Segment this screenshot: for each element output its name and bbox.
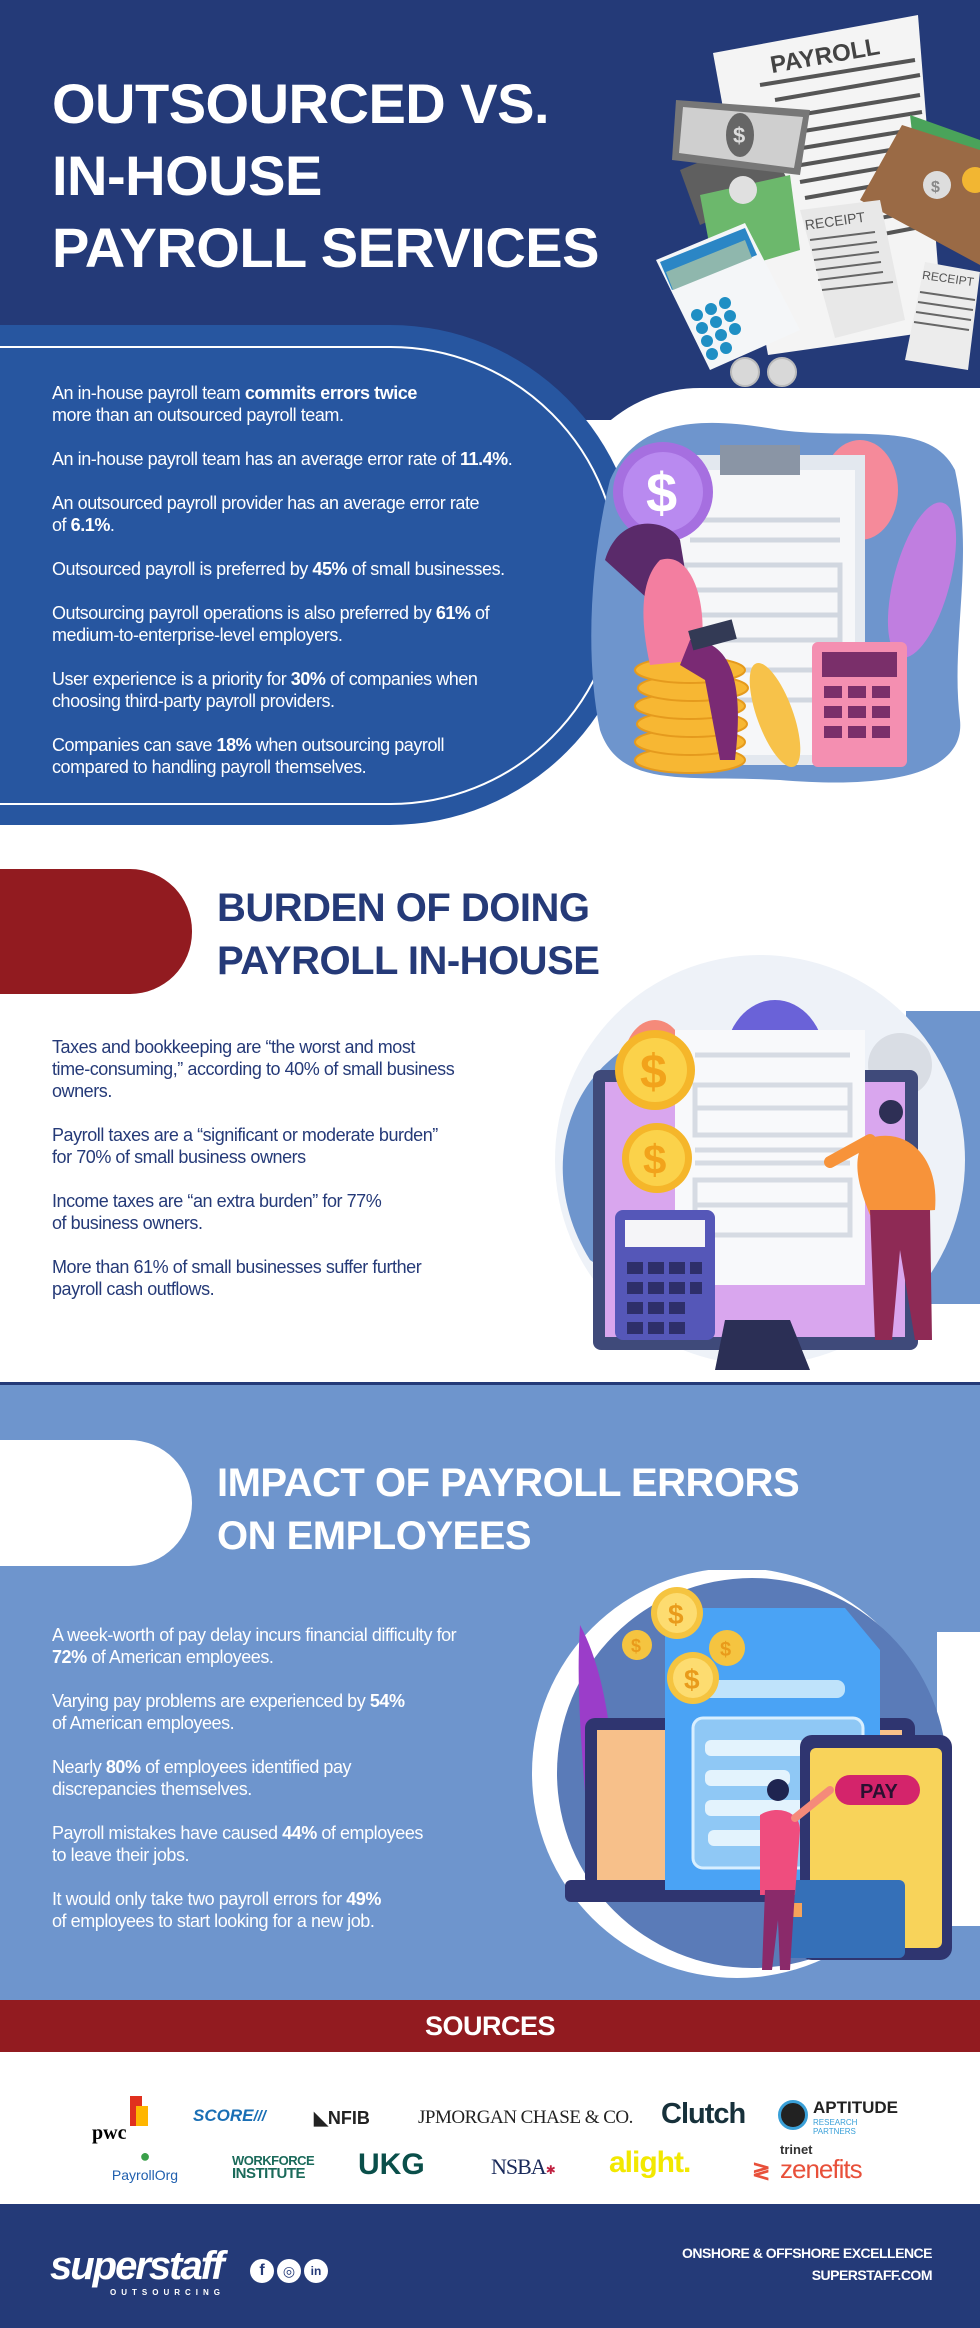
- stat: 54%: of American employees.: [52, 1713, 234, 1733]
- grey bills: [672, 100, 810, 275]
- illustration: invoice, phone PAY, man: $: [720, 1639, 731, 1661]
- stat: 30%: [52, 669, 477, 711]
- stat: 49%: [52, 1889, 381, 1931]
- impact stats text: [52, 1625, 456, 1931]
- stat: 61%: payroll cash outflows.: [52, 1279, 214, 1299]
- sources header bar: SOURCES: [425, 2011, 555, 2041]
- logo: Workforce Institute: WORKFORCE: [232, 2153, 314, 2168]
- logo: trinet zenefits: [752, 2142, 862, 2184]
- receipts: RECEIPT: [804, 209, 867, 233]
- logo: alight: alight.: [609, 2146, 690, 2179]
- footer: [0, 2204, 980, 2328]
- stat: 77%: [52, 1191, 382, 1233]
- logo: Aptitude: [778, 2098, 898, 2136]
- logo: Workforce Institute: [232, 2153, 314, 2182]
- stat: 49%: It would only take two payroll errors for 49%: [52, 1889, 381, 1909]
- logo: trinet zenefits: ≷: [752, 2158, 770, 2183]
- stat: errors twice: An in-house payroll team commits errors twice: [52, 383, 417, 403]
- wallet with green bill: $: [931, 179, 940, 196]
- white backdrop for illustration: [560, 388, 980, 858]
- stat: 44%: to leave their jobs.: [52, 1845, 189, 1865]
- stat: 11.4%: An in-house payroll team has an average error rate of 11.4%.: [52, 449, 512, 469]
- stat: 40%: [52, 1037, 454, 1101]
- title: PAYROLL SERVICES: [52, 216, 599, 279]
- coins: [731, 358, 796, 386]
- stat: 72%: 72% of American employees.: [52, 1647, 273, 1667]
- logo: Aptitude: RESEARCH PARTNERS: [813, 2118, 857, 2136]
- logo: JPMorgan: JPMORGAN CHASE & CO.: [418, 2107, 633, 2128]
- stat: 40%: Taxes and bookkeeping are “the worst and most: [52, 1037, 415, 1057]
- stat: 40%: owners.: [52, 1081, 112, 1101]
- logo: trinet zenefits: zenefits: [780, 2154, 862, 2184]
- white pill: [0, 1440, 192, 1566]
- stat: 40%: time-consuming,” according to 40% of small business: [52, 1059, 454, 1079]
- stat: 6.1%: [52, 493, 479, 535]
- stat: 61%: Outsourcing payroll operations is also preferred by 61% of: [52, 603, 489, 623]
- divider line: [0, 1382, 980, 1385]
- stat: 70%: Payroll taxes are a “significant or moderate burden”: [52, 1125, 438, 1145]
- stat: 72%: A week-worth of pay delay incurs financial difficulty for: [52, 1625, 456, 1645]
- illustration: invoice, phone PAY, man: [532, 1570, 980, 1978]
- heading: IMPACT OF PAYROLL ERRORS: [217, 1461, 799, 1505]
- stat: 18%: Companies can save 18% when outsourcing payroll: [52, 735, 444, 755]
- grey bills: $: [733, 123, 745, 148]
- stat: 54%: [52, 1691, 405, 1733]
- social icons: f: [259, 2262, 265, 2279]
- logo: trinet zenefits: trinet: [780, 2142, 812, 2157]
- logo: Workforce Institute: INSTITUTE: [232, 2165, 305, 2182]
- logo: superstaff: superstaff: [50, 2244, 223, 2288]
- stat: 6.1%: An outsourced payroll provider has an average error rate: [52, 493, 479, 513]
- header background: [0, 0, 980, 420]
- social icons: ◎: [283, 2263, 295, 2279]
- stat: 80%: Nearly 80% of employees identified pay: [52, 1757, 351, 1777]
- stat: errors twice: more than an outsourced payroll team.: [52, 405, 344, 425]
- stat: 61%: [52, 603, 490, 645]
- stat: 61%: [52, 1257, 422, 1299]
- red pill: [0, 869, 192, 994]
- stat: 54%: Varying pay problems are experienced by 54%: [52, 1691, 405, 1711]
- logo: Aptitude: APTITUDE: [813, 2098, 898, 2117]
- stat: 45%: Outsourced payroll is preferred by 45% of small businesses.: [52, 559, 505, 579]
- panel outline: [0, 346, 620, 805]
- illustration: invoice, phone PAY, man: $: [668, 1599, 684, 1630]
- stat: errors twice: [52, 383, 417, 425]
- title: [52, 72, 599, 279]
- footer tagline: SUPERSTAFF.COM: [812, 2267, 932, 2283]
- stat: 44%: Payroll mistakes have caused 44% of employees: [52, 1823, 423, 1843]
- panel background: [0, 325, 640, 825]
- stat: 70%: [52, 1125, 438, 1167]
- stat: 30%: User experience is a priority for 30% of companies when: [52, 669, 477, 689]
- stat: 80%: discrepancies themselves.: [52, 1779, 252, 1799]
- heading: [217, 886, 599, 983]
- logo: PayrollOrg: ●: [140, 2146, 150, 2166]
- header illustration: payroll documents and money: [656, 15, 980, 387]
- logo: SCORE: SCORE///: [193, 2106, 266, 2125]
- wallet with green bill: [860, 115, 980, 265]
- illustration: monitor, coins, calculator, man: $: [643, 1136, 666, 1183]
- stat: 30%: choosing third-party payroll providers.: [52, 691, 335, 711]
- stat: 61%: More than 61% of small businesses suffer further: [52, 1257, 421, 1277]
- heading: BURDEN OF DOING: [217, 886, 590, 930]
- stat: 18%: [52, 735, 444, 777]
- illustration: monitor, coins, calculator, man: [555, 955, 980, 1370]
- calculator: [656, 223, 800, 370]
- illustration: clipboard, woman on coins: [591, 422, 963, 782]
- heading: [217, 1461, 799, 1558]
- footer tagline: ONSHORE & OFFSHORE EXCELLENCE: [682, 2245, 932, 2261]
- footer tagline: [682, 2245, 932, 2283]
- receipts: [800, 200, 980, 370]
- section: burden of doing payroll in-house: [0, 869, 980, 1370]
- logo: pwc: [92, 2096, 148, 2144]
- stat: 77%: Income taxes are “an extra burden” for 77%: [52, 1191, 381, 1211]
- logo: PayrollOrg: PayrollOrg: [112, 2167, 178, 2183]
- sources header bar: [0, 2000, 980, 2052]
- title: OUTSOURCED VS.: [52, 72, 549, 135]
- illustration: invoice, phone PAY, man: $: [631, 1636, 641, 1656]
- illustration: monitor, coins, calculator, man: $: [640, 1046, 667, 1099]
- logo: Clutch: Clutch: [661, 2098, 745, 2130]
- stat: 49%: of employees to start looking for a new job.: [52, 1911, 374, 1931]
- logo: NSBA: NSBA✱: [491, 2154, 555, 2179]
- section: impact of payroll errors: [0, 1385, 980, 2000]
- sources logos: [0, 2052, 980, 2204]
- panel: outsourced vs in-house stats: [0, 325, 963, 825]
- stat: 72%: [52, 1625, 456, 1667]
- social icons: in: [311, 2264, 321, 2278]
- illustration: invoice, phone PAY, man: PAY: [860, 1781, 898, 1803]
- logo: PayrollOrg: [112, 2146, 178, 2183]
- stat: 61%: medium-to-enterprise-level employers.: [52, 625, 342, 645]
- stat: 18%: compared to handling payroll themselves.: [52, 757, 366, 777]
- logo: UKG: UKG: [358, 2148, 425, 2181]
- title: IN-HOUSE: [52, 144, 322, 207]
- logo: NFIB: ◣NFIB: [314, 2108, 370, 2128]
- stat: 70%: for 70% of small business owners: [52, 1147, 306, 1167]
- burden stats text: [52, 1037, 454, 1299]
- social icons: [250, 2259, 328, 2283]
- illustration: invoice, phone PAY, man: $: [684, 1664, 700, 1695]
- stat: 80%: [52, 1757, 352, 1799]
- stat: 6.1%: of 6.1%.: [52, 515, 114, 535]
- illustration: clipboard, woman on coins: $: [646, 461, 677, 524]
- logo: pwc: pwc: [92, 2122, 126, 2144]
- heading: ON EMPLOYEES: [217, 1514, 531, 1558]
- payroll paper: PAYROLL: [768, 33, 882, 79]
- stats text: [52, 383, 512, 777]
- stat: 77%: of business owners.: [52, 1213, 203, 1233]
- heading: PAYROLL IN-HOUSE: [217, 939, 599, 983]
- logo: superstaff: OUTSOURCING: [110, 2288, 225, 2297]
- receipts: RECEIPT: [921, 268, 975, 289]
- payroll paper: [713, 15, 943, 355]
- stat: 44%: [52, 1823, 423, 1865]
